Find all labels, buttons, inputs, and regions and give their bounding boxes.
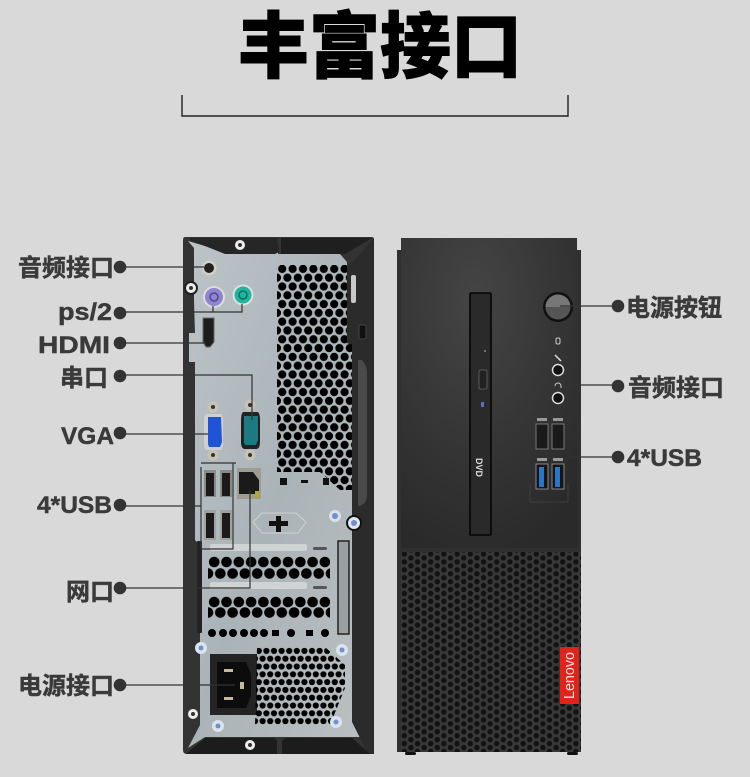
side latch slot [359, 325, 366, 339]
label: VGA: VGA [61, 423, 114, 450]
mic jack [552, 364, 564, 376]
bottom black band right [282, 738, 370, 754]
label: power socket: 电源接口 [18, 673, 114, 700]
rear view of tower [183, 237, 374, 754]
title bracket [182, 95, 568, 116]
top screw [235, 240, 245, 250]
dvd logo: DVD [474, 458, 484, 478]
top hex vent [277, 265, 352, 490]
front usb ports [530, 418, 568, 502]
ethernet port [237, 468, 261, 499]
audio jack [202, 260, 216, 276]
plus slot [253, 513, 306, 533]
drive eject button [479, 370, 487, 389]
slot bracket [338, 541, 349, 634]
power button [543, 292, 573, 322]
label: rear USB: 4*USB [37, 492, 112, 519]
psu power socket [210, 654, 257, 715]
card vent 1 [208, 556, 330, 580]
label: serial: 串口 [60, 365, 108, 392]
vent small squares [280, 478, 329, 485]
label: rear USB [37, 463, 236, 549]
label: audio front: 音频接口 [628, 375, 724, 402]
ps/2 green [232, 284, 254, 306]
label: front USB [568, 445, 702, 472]
screw [329, 510, 341, 522]
hdmi port [203, 318, 214, 347]
left screw [185, 282, 197, 294]
side strip [397, 250, 581, 752]
label: power button [560, 295, 722, 322]
label: front USB: 4*USB [627, 445, 702, 472]
front view of tower [397, 238, 581, 755]
drive blue light [481, 402, 484, 407]
serial port [241, 400, 260, 460]
usb ports [204, 470, 232, 540]
label: network: 网口 [66, 579, 114, 606]
label: network [66, 490, 250, 606]
card small slot 1 [313, 547, 327, 550]
label: serial [60, 365, 252, 420]
right frame [347, 238, 374, 754]
headphone icon [555, 383, 561, 388]
power led [556, 338, 560, 344]
vent bottom row [208, 629, 329, 637]
label: audio rear: 音频接口 [18, 255, 114, 282]
bottom black band left [186, 738, 277, 754]
side latch [351, 275, 356, 303]
label: audio rear [18, 255, 204, 282]
side groove [358, 360, 367, 506]
psu screws [195, 642, 348, 732]
left long slot [197, 541, 202, 633]
top black bar [190, 238, 279, 254]
mic icon [555, 355, 561, 361]
ps/2 purple [203, 286, 225, 308]
label: ps/2 [58, 299, 242, 326]
vga port [204, 402, 223, 460]
psu vent [255, 647, 345, 725]
right screw [347, 516, 361, 530]
rear chassis frame [183, 237, 374, 754]
card vent 2 [208, 596, 330, 619]
card small slot 2 [313, 586, 327, 589]
label: audio front [569, 375, 724, 402]
label: HDMI [38, 332, 206, 359]
top right black cap [281, 238, 372, 254]
headphone jack [552, 392, 564, 404]
card slot bar 1 [210, 544, 307, 551]
label: power socket [18, 673, 235, 700]
upper front panel [401, 238, 578, 548]
label: power button: 电源按钮 [626, 295, 722, 322]
lower left screw [188, 709, 198, 719]
bottom screw [245, 740, 255, 750]
optical drive [470, 293, 491, 535]
lower mesh panel [401, 552, 581, 752]
card slot bar 2 [210, 582, 307, 589]
label: ps/2: ps/2 [58, 299, 112, 326]
rear metal plate [188, 241, 372, 750]
label: HDMI: HDMI [38, 332, 110, 359]
feet [405, 752, 578, 755]
lenovo badge: Lenovo [562, 652, 578, 699]
plus cutout [269, 516, 288, 532]
drive led dot [484, 350, 486, 352]
label: VGA [61, 423, 208, 450]
